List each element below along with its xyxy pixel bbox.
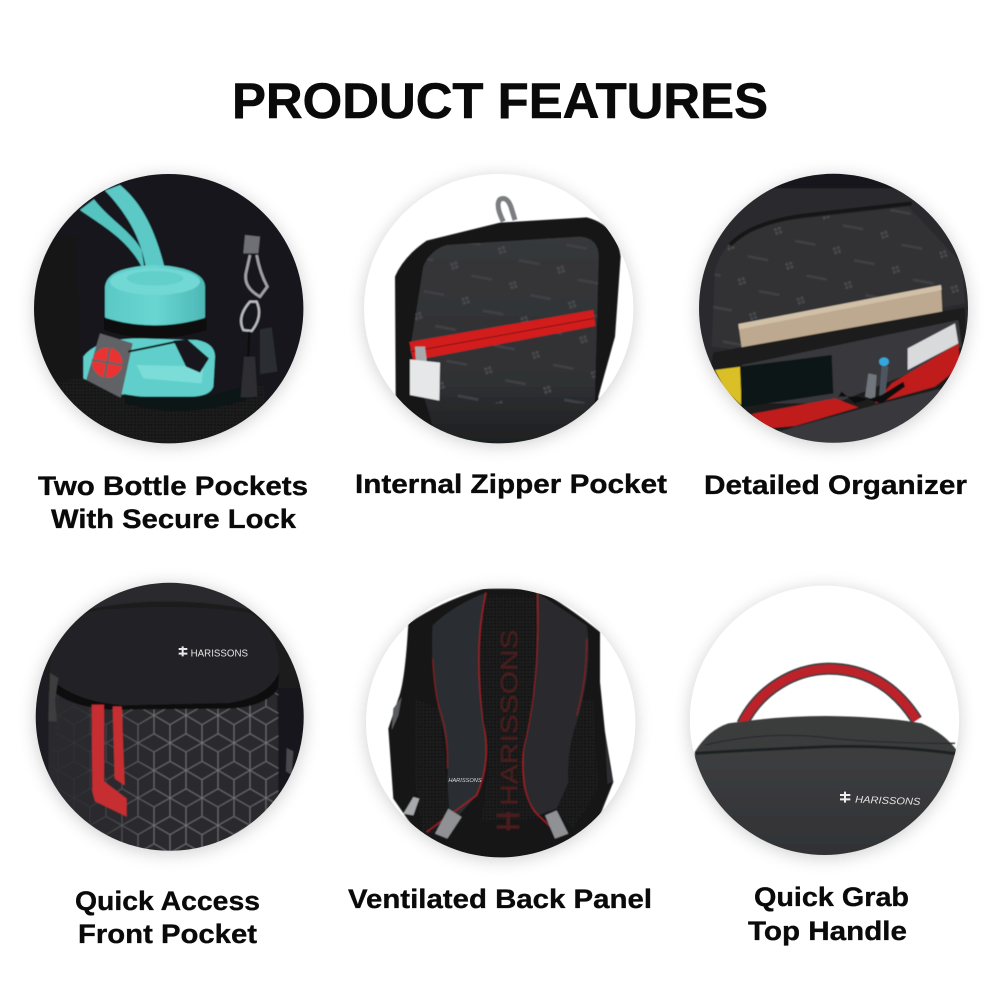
panel: quick grab top handle label: Top Handle: [748, 916, 907, 946]
panel: bottle pockets: [30, 170, 310, 450]
panel: bottle pockets label: With Secure Lock: [51, 504, 297, 534]
panel: ventilated back panel label: Ventilated Back Panel: [348, 884, 652, 914]
panel: detailed organizer label: Detailed Organizer: [704, 470, 968, 500]
panel: quick access front pocket label: Quick Access: [75, 886, 260, 916]
icon: back panel photo: HARISSONS: [448, 778, 482, 784]
logo: Harissons: HARISSONS: [855, 795, 921, 808]
panel: quick access front pocket label: Front Pocket: [78, 919, 257, 949]
panel: bottle pockets label: [38, 471, 308, 534]
icon: back panel photo: HARISSONS: [497, 629, 524, 806]
panel: quick access front pocket label: [75, 886, 260, 949]
icon: top handle photo: [685, 580, 965, 860]
panel: internal zipper pocket label: Internal Zipper Pocket: [355, 469, 667, 499]
panel: bottle pockets label: Two Bottle Pockets: [38, 471, 308, 501]
logo: Harissons: HARISSONS: [191, 649, 248, 660]
logo: Harissons: [178, 646, 248, 656]
logo: Harissons: [840, 792, 920, 805]
panel: quick grab top handle: [685, 580, 965, 860]
panel: quick grab top handle label: [748, 882, 909, 946]
icon: organizer photo: [695, 170, 975, 450]
panel: internal zipper pocket: [360, 170, 640, 450]
icon: zipper pocket photo: [360, 170, 640, 450]
panel: ventilated back panel: [360, 582, 640, 862]
icon: front pocket photo: [30, 578, 310, 858]
panel: quick grab top handle label: Quick Grab: [754, 882, 909, 912]
panel: detailed organizer: [695, 170, 975, 450]
panel: quick access front pocket: [30, 578, 310, 858]
icon: bottle pocket photo: [30, 170, 310, 450]
title: PRODUCT FEATURES: [232, 73, 768, 129]
icon: back panel photo: [360, 582, 640, 862]
